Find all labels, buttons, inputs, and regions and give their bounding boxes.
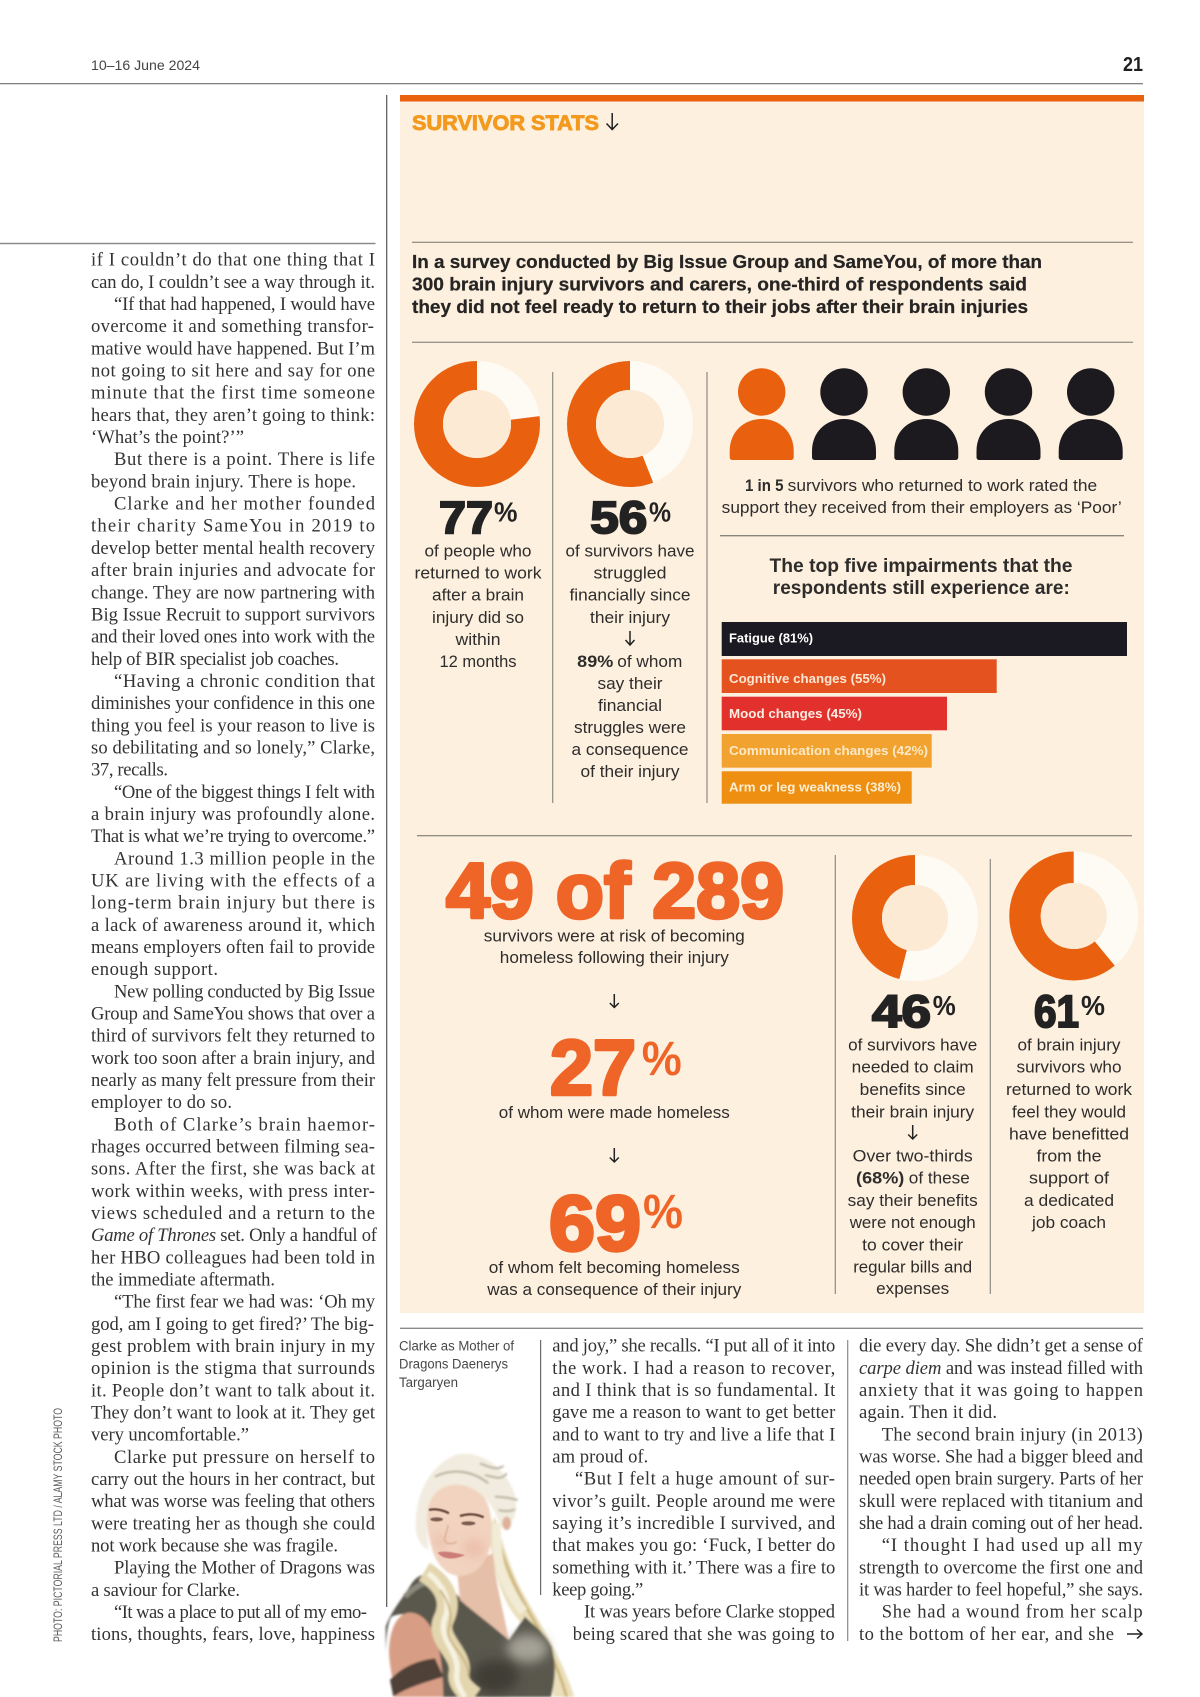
article column 3: needed open brain surgery. Parts of her — [859, 1469, 1144, 1490]
stat: 56% donut and text: of survivors have — [566, 542, 694, 561]
stat: 61% donut and text: survivors who — [1016, 1058, 1122, 1077]
big number 69%: 69 — [549, 1179, 641, 1267]
big number 69% — [549, 1179, 683, 1267]
page header — [0, 54, 1143, 84]
stat: 56% donut and text: their injury — [590, 608, 671, 627]
stat: 77% donut and text: of people who — [424, 542, 532, 561]
stat: 77% donut and text: returned to work — [414, 564, 542, 583]
page number: 21 — [1123, 54, 1143, 76]
photo caption: Clarke as Mother of — [399, 1339, 514, 1354]
article column 2: that makes you go: ‘Fuck, I better do — [552, 1535, 835, 1556]
article column 1: third of survivors felt they returned to — [91, 1026, 375, 1047]
stat: 77% donut and text — [414, 376, 542, 671]
article column 1: Game of Thrones set. Only a handful of — [91, 1225, 378, 1246]
article column 1: “One of the biggest things I felt with — [114, 782, 376, 803]
stat: 56% donut and text: financial — [598, 696, 662, 715]
stat: 56% donut and text: 89% — [577, 652, 613, 671]
icon: down arrow — [610, 994, 619, 1008]
article column 3: She had a wound from her scalp — [882, 1602, 1143, 1623]
icon: continue arrow — [1127, 1630, 1142, 1638]
article column 1: very uncomfortable.” — [91, 1425, 249, 1446]
article column 1: opinion is the stigma that surrounds — [91, 1358, 375, 1379]
article column 1: diminishes your confidence in this one — [91, 693, 375, 714]
stat: 77% donut and text: 12 months — [440, 652, 516, 671]
big number 27%: 27 — [550, 1024, 636, 1112]
bar: fatigue: Fatigue (81%) — [729, 631, 813, 646]
article column 1: means employers often fail to provide — [91, 937, 375, 958]
icon: down arrow — [908, 1125, 917, 1139]
stat: 56% donut and text: financially since — [570, 586, 690, 605]
article column 1: “The first fear we had was: ‘Oh my — [114, 1292, 376, 1313]
intro text: In a survey conducted by Big Issue Group and SameYou, of more than — [412, 251, 1042, 272]
stat: 56% donut and text: say their — [598, 674, 663, 693]
article column 3: again. Then it did. — [859, 1402, 997, 1423]
article column 1: change. They are now partnering with — [91, 582, 376, 603]
bar: fatigue — [722, 622, 1127, 656]
article column 2: “But I felt a huge amount of sur- — [575, 1469, 835, 1490]
stat: 61% donut and text: of brain injury — [1018, 1036, 1121, 1055]
article column 2: keep going.” — [552, 1580, 643, 1601]
stat: 61% donut and text: returned to work — [1006, 1080, 1133, 1099]
article column 1: their charity SameYou in 2019 to — [91, 516, 375, 537]
article column 1: can do, I couldn’t see a way through it. — [91, 272, 375, 293]
intro text — [412, 251, 1042, 317]
article column 1: long-term brain injury but there is — [91, 893, 375, 914]
article column 2: something with it.’ There was a fire to — [552, 1557, 835, 1578]
stat: 46% donut and text: benefits since — [860, 1080, 966, 1099]
intro text: they did not feel ready to return to their jobs after their brain injuries — [412, 296, 1028, 317]
stat: homelessness funnel: survivors were at risk of becoming — [484, 927, 745, 946]
stat: 61% donut and text: a dedicated — [1024, 1191, 1114, 1210]
article column 3: to the bottom of her ear, and she — [859, 1624, 1114, 1645]
stat: 61% donut and text: from the — [1036, 1147, 1102, 1166]
article column 1: 37, recalls. — [91, 760, 168, 781]
article column 3: die every day. She didn’t get a sense of — [859, 1336, 1144, 1357]
bar chart heading: respondents still experience are: — [773, 578, 1070, 599]
article column 3: was worse. She had a bigger bleed and — [859, 1446, 1144, 1468]
article column 1: Both of Clarke’s brain haemor- — [114, 1114, 375, 1135]
article column 2: saying it’s incredible I survived, and — [552, 1513, 836, 1534]
article column 1: it. People don’t want to talk about it. — [91, 1380, 375, 1401]
article column 1: work too soon after a brain injury, and — [91, 1048, 376, 1069]
article column 1: “Having a chronic condition that — [114, 671, 376, 692]
stat: 61% donut and text: support of — [1029, 1168, 1109, 1188]
article column 1: employer to do so. — [91, 1092, 232, 1113]
stat: 61% donut and text: % — [1081, 990, 1105, 1021]
article column 1: beyond brain injury. There is hope. — [91, 471, 356, 492]
stat: 61% donut and text: feel they would — [1012, 1102, 1126, 1121]
bar: communication changes — [722, 734, 932, 768]
photo: Clarke as Daenerys Targaryen — [386, 1454, 574, 1697]
stat: 46% donut and text: % — [933, 990, 956, 1021]
article column 1: what was worse was feeling that others — [91, 1491, 375, 1512]
big number 27%: % — [642, 1033, 682, 1086]
icon: down arrow — [626, 631, 634, 645]
article column 1: minute that the first time someone — [91, 383, 375, 404]
article column 1: overcome it and something transfor- — [91, 316, 374, 337]
article column 2: being scared that she was going to — [573, 1624, 835, 1645]
article column 1: not work because she was fragile. — [91, 1536, 338, 1557]
article column 1: after brain injuries and advocate for — [91, 560, 376, 581]
article column 1: mative would have happened. But I’m — [91, 338, 376, 359]
article column 1: not going to sit here and say for one — [91, 361, 375, 382]
bar: cognitive changes — [722, 659, 997, 693]
article column 1: so debilitating and so lonely,” Clarke, — [91, 737, 375, 758]
article column 1: ‘What’s the point?’” — [91, 427, 244, 448]
stat: homelessness funnel: of whom felt becoming homeless — [489, 1258, 740, 1277]
article column 3: it was harder to feel hopeful,” she says. — [859, 1580, 1143, 1601]
article column 2: and I think that is so fundamental. It — [552, 1380, 836, 1401]
article column 2: am proud of. — [552, 1446, 648, 1468]
stat: 61% donut and text: job coach — [1031, 1213, 1106, 1232]
stat: 77% donut and text: % — [494, 497, 518, 528]
article column 3 — [859, 1336, 1144, 1645]
icon: person orange — [730, 368, 794, 460]
stat: 56% donut and text: % — [649, 497, 671, 528]
article column 3: The second brain injury (in 2013) — [882, 1424, 1143, 1445]
donut chart 61% — [1025, 867, 1122, 965]
stat: 61% donut and text: 61 — [1034, 986, 1079, 1037]
stat: 56% donut and text: struggles were — [574, 718, 686, 737]
article column 1: help of BIR specialist job coaches. — [91, 649, 339, 670]
bar: mood changes: Mood changes (45%) — [729, 706, 862, 721]
stat: 1 in 5 pictogram: 1 in 5 — [745, 476, 784, 495]
article column 2: and to want to try and live a life that I — [552, 1424, 835, 1445]
stat: 46% donut and text: to cover their — [862, 1236, 964, 1255]
article column 3: “I thought I had used up all my — [882, 1535, 1143, 1556]
bar chart heading — [770, 556, 1072, 599]
stat: 1 in 5 pictogram: survivors who returned to work rated the — [788, 476, 1097, 495]
panel: survivor stats — [400, 95, 1144, 1313]
stat: 46% donut and text: (68%) — [856, 1168, 904, 1188]
bar chart: top five impairments — [722, 556, 1127, 804]
stat: 46% donut and text — [848, 870, 978, 1298]
article column 1: carry out the hours in her contract, but — [91, 1469, 376, 1490]
stat: 46% donut and text: Over two-thirds — [853, 1147, 973, 1166]
article column 1: nearly as many felt pressure from their — [91, 1070, 376, 1091]
stat: 46% donut and text: regular bills and — [853, 1258, 972, 1277]
stat: 46% donut and text: needed to claim — [852, 1058, 974, 1077]
article column 1: But there is a point. There is life — [114, 449, 375, 470]
article column 1: Around 1.3 million people in the — [114, 848, 375, 869]
stat: 1 in 5 pictogram — [722, 368, 1123, 517]
article column 2: gave me a reason to want to get better — [552, 1402, 836, 1423]
stat: 56% donut and text: struggled — [594, 564, 666, 583]
stat: 1 in 5 pictogram: support they received from their employers as ‘Poor’ — [722, 498, 1122, 517]
stat: 56% donut and text: 56 — [590, 492, 647, 543]
article column 2 — [552, 1336, 836, 1645]
donut chart 56% — [582, 376, 678, 472]
stat: 77% donut and text: injury did so — [432, 608, 524, 627]
stat: 46% donut and text: say their benefits — [848, 1191, 978, 1210]
bar: arm or leg weakness: Arm or leg weakness (38%) — [729, 780, 901, 795]
article column 1: the immediate aftermath. — [91, 1270, 275, 1290]
article column 2: It was years before Clarke stopped — [584, 1602, 836, 1623]
bar chart heading: The top five impairments that the — [770, 556, 1072, 577]
photo caption: Targaryen — [399, 1375, 458, 1390]
donut chart 46% — [867, 870, 963, 966]
article column 1: Clarke put pressure on herself to — [114, 1447, 375, 1468]
article column 1: tions, thoughts, fears, love, happiness — [91, 1624, 375, 1645]
big number 49 of 289: 49 of 289 — [446, 846, 784, 934]
article column 3: she had a drain coming out of her head. — [859, 1513, 1143, 1534]
article column 1: Group and SameYou shows that over a — [91, 1004, 375, 1024]
article column 1: Big Issue Recruit to support survivors — [91, 604, 375, 625]
article column 1: if I couldn’t do that one thing that I — [91, 250, 375, 271]
article column 1: sons. After the first, she was back at — [91, 1159, 376, 1180]
article column 1: god, am I going to get fired?’ The big- — [91, 1314, 374, 1335]
stat: 46% donut and text: 46 — [872, 986, 931, 1037]
icon: person black — [1059, 368, 1123, 460]
article column 1 — [91, 250, 378, 1645]
photo caption — [399, 1339, 514, 1390]
stat: 56% donut and text — [566, 376, 694, 781]
facial features — [429, 1509, 484, 1558]
stat: 56% donut and text: a consequence — [572, 740, 688, 759]
article column 1: “If that had happened, I would have — [114, 294, 375, 315]
article column 1: They don’t want to look at it. They get — [91, 1403, 376, 1424]
bar: mood changes — [722, 697, 947, 730]
stat: 46% donut and text: their brain injury — [851, 1102, 975, 1121]
icon: person black — [976, 368, 1040, 460]
article column 1: That is what we’re trying to overcome.” — [91, 826, 375, 847]
stat: homelessness funnel: of whom were made homeless — [499, 1103, 730, 1122]
bar: arm or leg weakness — [722, 771, 912, 804]
bar: communication changes: Communication changes (42%) — [729, 743, 928, 758]
article column 1: Clarke and her mother founded — [114, 494, 376, 515]
article column 1: views scheduled and a return to the — [91, 1203, 375, 1224]
article column 1: work within weeks, with press inter- — [91, 1181, 375, 1202]
article column 2: and joy,” she recalls. “I put all of it into — [552, 1336, 835, 1357]
stat: homelessness funnel — [446, 846, 784, 1299]
stat: 56% donut and text: of their injury — [580, 762, 680, 781]
article column 1: “It was a place to put all of my emo- — [114, 1602, 367, 1623]
stat: 77% donut and text: 77 — [439, 492, 493, 543]
stat: 77% donut and text: within — [454, 630, 500, 649]
article column 1: a brain injury was profoundly alone. — [91, 804, 375, 825]
article column 1: a lack of awareness around it, which — [91, 915, 376, 936]
big number 69%: % — [643, 1186, 683, 1239]
big number 27% — [550, 1024, 682, 1112]
icon: person black — [812, 368, 876, 460]
photo credit: PHOTO: PICTORIAL PRESS LTD / ALAMY STOCK PHOTO — [51, 1408, 65, 1642]
stat: 77% donut and text: after a brain — [432, 586, 524, 605]
bar: cognitive changes: Cognitive changes (55%) — [729, 671, 886, 686]
article column 1: thing you feel is your reason to live is — [91, 715, 375, 736]
article column 1: a saviour for Clarke. — [91, 1580, 240, 1601]
article column 1: and their loved ones into work with the — [91, 627, 375, 648]
article column 3: strength to overcome the first one and — [859, 1557, 1144, 1578]
stat: homelessness funnel: homeless following their injury — [500, 948, 729, 967]
article column 3: anxiety that it was going to happen — [859, 1380, 1144, 1401]
stat: homelessness funnel: was a consequence of their injury — [486, 1280, 742, 1299]
icon: heading arrow — [606, 113, 618, 130]
stat: 46% donut and text: were not enough — [849, 1213, 976, 1232]
article column 1: Playing the Mother of Dragons was — [114, 1558, 375, 1579]
stat: 46% donut and text: of these — [909, 1168, 970, 1188]
article column 1: enough support. — [91, 959, 218, 980]
panel heading: SURVIVOR STATS — [412, 111, 599, 135]
article column 1: hears that, they aren’t going to think: — [91, 405, 375, 426]
article column 3: skull were replaced with titanium and — [859, 1491, 1144, 1512]
stat: 46% donut and text: of survivors have — [848, 1036, 977, 1055]
article column 1: UK are living with the effects of a — [91, 870, 375, 892]
article column 1: develop better mental health recovery — [91, 538, 376, 559]
donut chart 77% — [428, 376, 526, 472]
photo caption: Dragons Daenerys — [399, 1356, 508, 1372]
stat: 56% donut and text: of whom — [617, 652, 682, 671]
article column 1: gest problem with brain injury in my — [91, 1336, 376, 1357]
article column 3: carpe diem and was instead filled with — [859, 1358, 1144, 1379]
icon: down arrow — [610, 1148, 619, 1162]
article column 1: were treating her as though she could — [91, 1513, 376, 1534]
icon: person black — [894, 368, 958, 460]
article column 1: her HBO colleagues had been told in — [91, 1247, 376, 1268]
article column 1: rhages occurred between filming sea- — [91, 1136, 375, 1158]
intro text: 300 brain injury survivors and carers, one-third of respondents said — [412, 274, 1027, 294]
stat: 61% donut and text — [1006, 867, 1133, 1232]
article column 1: New polling conducted by Big Issue — [114, 981, 375, 1002]
stat: 46% donut and text: expenses — [876, 1279, 949, 1298]
article column 2: vivor’s guilt. People around me were — [552, 1491, 835, 1512]
stat: 61% donut and text: have benefitted — [1009, 1124, 1129, 1144]
issue date: 10–16 June 2024 — [91, 57, 200, 73]
article column 2: the work. I had a reason to recover, — [552, 1358, 835, 1379]
